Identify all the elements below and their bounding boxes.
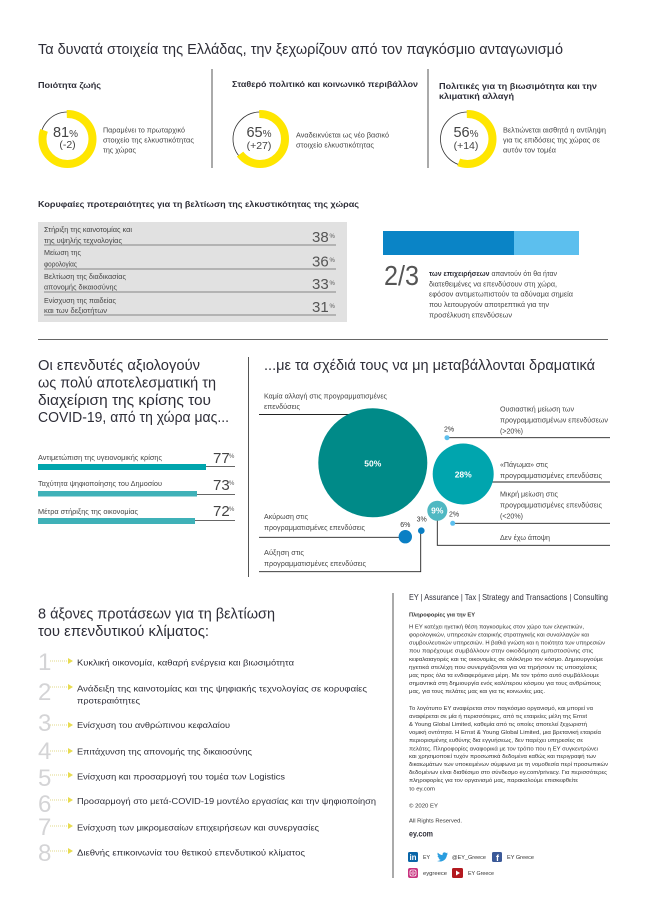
- heading: top priorities: Κορυφαίες προτεραιότητες για τη βελτίωση της ελκυστικότητας της χώρας: [38, 199, 360, 209]
- label: freeze: «Πάγωμα» στις: [500, 461, 549, 469]
- text block: legal: & Young Global Limited, καθεμία από τις οποίες αποτελεί ξεχωριστή: [409, 721, 587, 728]
- bubble: substantial decrease 2%: [444, 427, 454, 440]
- social: Instagram: eygreece: [423, 871, 447, 877]
- label: freeze: προγραμματισμένες επενδύσεις: [500, 472, 603, 480]
- description: sustainability: αυτόν τον τομέα: [503, 146, 556, 154]
- social: Instagram: [408, 868, 447, 878]
- social: LinkedIn: in: [409, 853, 417, 862]
- callout: two thirds of businesses: εφόσον αντιμετωπιστούν τα αδύναμα σημεία: [429, 290, 573, 298]
- item 4: [38, 738, 252, 765]
- label: no opinion: Δεν έχω άποψη: [500, 534, 550, 542]
- item 5: 5: [38, 765, 51, 792]
- item 8: Διεθνής επικοινωνία του θετικού επενδυτικού κλίματος: [77, 848, 305, 858]
- label: increase: προγραμματισμένες επενδύσεις: [264, 560, 367, 568]
- panel: priorities table: [38, 222, 347, 322]
- heading: sustainability: Πολιτικές για τη βιωσιμότητα και την: [439, 81, 597, 91]
- item 3: [38, 710, 230, 737]
- social: LinkedIn: [408, 852, 430, 862]
- bubble: small decrease 2%: [449, 512, 459, 526]
- item 3: Ενίσχυση του ανθρώπινου κεφαλαίου: [77, 720, 230, 730]
- panel: EY boilerplate: [408, 592, 608, 878]
- callout: two thirds of businesses: που λειτουργούν αποτρεπτικά για την: [429, 301, 550, 309]
- item 4: 4: [38, 738, 51, 765]
- text block: legal: Το λογότυπο ΕΥ αναφέρεται στον παγκόσμιο οργανισμό, και μπορεί να: [409, 705, 594, 712]
- label: substantial decrease: προγραμματισμένων επενδύσεων: [500, 417, 608, 425]
- bar: digitalisation 73%: %: [229, 481, 235, 487]
- panel: quality of life: [38, 80, 195, 166]
- label: small decrease: Μικρή μείωση στις: [500, 491, 559, 499]
- bubble: no opinion 9%: 9%: [431, 506, 444, 516]
- bubble: no change 50%: 50%: [364, 459, 382, 469]
- item 5: [38, 765, 285, 792]
- heading: stable environment: Σταθερό πολιτικό και κοινωνικό περιβάλλον: [232, 79, 418, 89]
- row: innovation 38%: %: [330, 234, 336, 240]
- bubble: cancellation 6%: [399, 522, 412, 543]
- heading: investors assess covid response: ως πολύ αποτελεσματική τη: [38, 374, 216, 392]
- heading: sustainability: κλιματική αλλαγή: [439, 91, 514, 101]
- social: LinkedIn: EY: [423, 855, 430, 861]
- label: no change: [264, 392, 388, 411]
- panel: sustainability and climate policies: [439, 81, 606, 166]
- row: taxation 36%: Μείωση της: [44, 249, 82, 257]
- item 6: 6: [38, 791, 51, 818]
- item 1: 1: [38, 649, 51, 676]
- row: education 31%: και των δεξιοτήτων: [44, 308, 108, 315]
- text block: about EY: μας, για τους πελάτες μας και για τις κοινωνίες μας.: [409, 688, 545, 695]
- donut chart: 65%: 65%: [246, 125, 272, 141]
- bar: health crisis 77%: 77: [213, 450, 230, 467]
- heading: plans not changing: ...με τα σχέδιά τους να μη μεταβάλλονται δραματικά: [264, 357, 595, 374]
- heading: investors assess covid response: [38, 357, 229, 426]
- text block: about EY: φορολογικών, υπηρεσιών εταιρικής στρατηγικής και συναλλαγών και: [409, 632, 590, 639]
- copyright: © 2020 EY: [409, 802, 438, 809]
- row: taxation 36%: φορολογίας: [44, 260, 78, 268]
- heading: sustainability: [439, 81, 597, 101]
- item 5: Ενίσχυση και προσαρμογή του τομέα των Logistics: [77, 772, 285, 782]
- bubble: freeze 28%: 28%: [455, 470, 472, 480]
- title: Τα δυνατά στοιχεία της Ελλάδας, την ξεχωρίζουν από τον παγκόσμιο ανταγωνισμό: [38, 41, 563, 58]
- text block: about EY: συμβουλευτικών υπηρεσιών. Η βαθιά γνώση και η ποιότητα των υπηρεσιών: [409, 640, 605, 647]
- bar: health crisis 77%: Αντιμετώπιση της υγειονομικής κρίσης: [38, 454, 163, 462]
- description: stable environment: Αναδεικνύεται ως νέο βασικό: [296, 132, 389, 140]
- bubble: no opinion 9%: [427, 501, 447, 521]
- item 2: [38, 679, 367, 706]
- bubble: increase 3%: [417, 517, 427, 534]
- description: quality of life: της χώρας: [103, 146, 137, 154]
- stacked bar: two thirds: [383, 231, 579, 255]
- bar: economic support 72%: %: [229, 507, 235, 513]
- label: freeze: [500, 461, 603, 480]
- bubble: cancellation 6%: 6%: [400, 522, 410, 529]
- label: increase: [264, 549, 367, 568]
- bar: economic support 72%: 72: [213, 503, 230, 520]
- item 8: 8: [38, 840, 51, 867]
- label: cancellation: [264, 513, 366, 532]
- item 6: [38, 791, 376, 818]
- description: quality of life: στοιχείο της ελκυστικότητας: [103, 136, 195, 144]
- bar: economic support 72%: [38, 503, 235, 524]
- row: taxation 36%: 36: [312, 254, 329, 270]
- social: YouTube: [452, 868, 494, 878]
- row: innovation 38%: της υψηλής τεχνολογίας: [44, 237, 123, 245]
- donut chart: 56%: [440, 112, 494, 166]
- label: increase: Αύξηση στις: [264, 549, 305, 557]
- text block: about EY: Η ΕΥ κατέχει ηγετική θέση παγκοσμίως στον χώρο των ελεγκτικών,: [409, 624, 584, 631]
- bar: health crisis 77%: [38, 450, 235, 470]
- row: taxation 36%: [44, 249, 336, 270]
- footer heading: service lines: EY | Assurance | Tax | Strategy and Transactions | Consulting: [409, 592, 608, 602]
- label: substantial decrease: Ουσιαστική μείωση των: [500, 406, 575, 414]
- callout: two thirds of businesses: των επιχειρήσεων απαντούν ότι θα ήταν: [429, 270, 557, 278]
- donut chart: 65%: (+27): [247, 140, 271, 152]
- description: quality of life: Παραμένει το πρωταρχικό: [103, 126, 185, 134]
- item 3: 3: [38, 710, 51, 737]
- donut chart: 56%: (+14): [454, 140, 478, 152]
- donut chart: 81%: 81%: [53, 125, 78, 141]
- item 8: [38, 840, 305, 867]
- social: Twitter: @EY_Greece: [452, 855, 486, 861]
- item 1: [38, 649, 294, 676]
- website: ey.com: [409, 830, 433, 839]
- row: justice 33%: απονομής δικαιοσύνης: [44, 284, 118, 292]
- item 2: Ανάδειξη της καινοτομίας και της ψηφιακής τεχνολογίας σε κορυφαίες: [77, 684, 367, 694]
- text block: legal: το ey.com: [409, 786, 435, 792]
- description: sustainability: για τις επιδόσεις της χώρας σε: [503, 136, 600, 144]
- row: justice 33%: Βελτίωση της διαδικασίας: [44, 273, 127, 281]
- bar: health crisis 77%: %: [229, 454, 235, 460]
- row: justice 33%: [44, 273, 336, 293]
- list: eight proposals: [38, 649, 376, 867]
- item 6: Προσαρμογή στο μετά-COVID-19 μοντέλο εργασίας και την ψηφιοποίηση: [77, 796, 376, 806]
- item 1: Κυκλική οικονομία, καθαρή ενέργεια και βιωσιμότητα: [77, 658, 294, 668]
- bar: digitalisation 73%: [38, 477, 235, 496]
- callout: two thirds of businesses: διατεθειμένες να επενδύσουν στη χώρα,: [429, 280, 557, 288]
- text block: about EY: ηγετικά στελέχη που συνεργάζονται για να τηρήσουν τις υποσχέσεις: [409, 664, 597, 671]
- label: small decrease: προγραμματισμένες επενδύσεις: [500, 502, 603, 510]
- bubble chart: investment plans: [259, 392, 610, 572]
- row: innovation 38%: [44, 226, 336, 246]
- text block: about EY: [409, 624, 605, 695]
- bubble: substantial decrease 2%: 2%: [444, 427, 454, 434]
- bar: economic support 72%: Μέτρα στήριξης της οικονομίας: [38, 508, 139, 516]
- description: quality of life: [103, 126, 195, 154]
- row: justice 33%: %: [330, 281, 336, 287]
- row: education 31%: %: [330, 304, 336, 310]
- label: substantial decrease: [500, 406, 608, 436]
- donut chart: 56%: 56%: [453, 125, 479, 141]
- bar: digitalisation 73%: Ταχύτητα ψηφιοποίησης του Δημοσίου: [38, 480, 162, 488]
- bar chart: covid response ratings: [38, 450, 235, 524]
- heading: eight proposals: [38, 606, 275, 640]
- heading: quality of life: Ποιότητα ζωής: [38, 80, 102, 90]
- social: Twitter: [437, 852, 486, 862]
- item 7: [38, 814, 319, 841]
- text block: about EY: κεφαλαιαγορές και τις οικονομίες σε ολόκληρο τον κόσμο. Δημιουργούμε: [409, 656, 603, 663]
- text block: legal: πληροφορίες για τον οργανισμό μας, παρακαλούμε επισκεφθείτε: [409, 777, 578, 784]
- description: stable environment: [296, 132, 389, 150]
- text block: legal: περιορισμένης ευθύνης δια εγγυήσεως, δεν παρέχει υπηρεσίες σε: [409, 737, 583, 744]
- callout: two thirds of businesses: [384, 260, 573, 320]
- text block: about EY: που παρέχουμε συμβάλλουν στην οικοδόμηση εμπιστοσύνης στις: [409, 648, 593, 655]
- social: Facebook: [492, 852, 534, 863]
- heading: investors assess covid response: Οι επενδυτές αξιολογούν: [38, 357, 200, 374]
- label: cancellation: προγραμματισμένες επενδύσεις: [264, 524, 366, 532]
- item 4: Επιτάχυνση της απονομής της δικαιοσύνης: [77, 746, 252, 756]
- item 2: προτεραιότητες: [77, 696, 140, 706]
- row: education 31%: Ενίσχυση της παιδείας: [44, 297, 117, 305]
- row: justice 33%: 33: [312, 276, 329, 293]
- text block: legal: και χρησιμοποιεί τυχόν προσωπικά δεδομένα καθώς και περιγραφή των: [409, 753, 596, 760]
- donut chart: 81%: (-2): [59, 139, 76, 151]
- row: innovation 38%: Στήριξη της καινοτομίας και: [44, 226, 132, 234]
- callout: two thirds of businesses: προσέλκυση επενδύσεων: [429, 312, 513, 320]
- label: no change: επενδύσεις: [264, 403, 301, 411]
- description: sustainability: [503, 126, 606, 154]
- callout: two thirds of businesses: 2/3: [384, 260, 419, 291]
- item 7: Ενίσχυση των μικρομεσαίων επιχειρήσεων και συνεργασίες: [77, 822, 319, 832]
- text block: legal: δεδομένων είναι διαθέσιμο στο σύνδεσμο ey.com/privacy. Για περισσότερες: [409, 769, 607, 776]
- text block: about EY: σημαντικά στη δημιουργία ενός καλύτερου κόσμου για τους ανθρώπους: [409, 680, 601, 687]
- label: cancellation: Ακύρωση στις: [264, 513, 309, 521]
- item 2: 2: [38, 679, 51, 706]
- bar: digitalisation 73%: 73: [213, 477, 230, 494]
- text block: legal: [409, 705, 608, 792]
- text block: legal: αναφέρεται σε μία ή περισσότερες, από τις εταιρείες μέλη της Ernst: [409, 713, 587, 720]
- text block: legal: δικαιωμάτων των υποκειμένων σύμφωνα με τη νομοθεσία περί προσωπικών: [409, 761, 608, 768]
- label: small decrease: [500, 491, 603, 520]
- row: education 31%: 31: [312, 299, 329, 316]
- text block: legal: νομική οντότητα. Η Ernst & Young Global Limited, μια βρετανική εταιρεία: [409, 729, 602, 736]
- heading: investors assess covid response: COVID-19, από τη χώρα μας...: [38, 409, 229, 426]
- donut chart: 65%: [233, 112, 287, 166]
- label: small decrease: (<20%): [500, 513, 523, 520]
- text block: legal: πελάτες. Πληροφορίες αναφορικά με τον τρόπο που η ΕΥ συγκεντρώνει: [409, 745, 599, 752]
- label: no change: Καμία αλλαγή στις προγραμματισμένες: [264, 392, 388, 400]
- heading: eight proposals: του επενδυτικού κλίματος:: [38, 623, 209, 640]
- bubble: small decrease 2%: 2%: [449, 512, 459, 519]
- social: Facebook: EY Greece: [507, 855, 534, 861]
- bubble: no change 50%: [318, 408, 427, 517]
- rights reserved: All Rights Reserved.: [409, 818, 462, 824]
- text block: about EY: μας προς όλα τα ενδιαφερόμενα μέρη. Με τον τρόπο αυτό συμβάλλουμε: [409, 672, 599, 679]
- social: Facebook: f: [496, 853, 500, 863]
- footer subheading: Πληροφορίες για την ΕΥ: [409, 613, 475, 619]
- heading: eight proposals: 8 άξονες προτάσεων για τη βελτίωση: [38, 606, 275, 622]
- bubble: increase 3%: 3%: [417, 517, 427, 524]
- row: taxation 36%: %: [330, 258, 336, 264]
- description: sustainability: Βελτιώνεται αισθητά η αντίληψη: [503, 126, 606, 134]
- bubble: freeze 28%: [433, 444, 494, 504]
- item 7: 7: [38, 814, 51, 841]
- row: education 31%: [44, 297, 336, 316]
- donut chart: 81%: [40, 112, 94, 166]
- social: YouTube: EY Greece: [468, 871, 494, 877]
- description: stable environment: στοιχείο ελκυστικότητας: [296, 142, 375, 150]
- panel: political and social environment: [232, 79, 418, 166]
- row: innovation 38%: 38: [312, 229, 329, 246]
- label: substantial decrease: (>20%): [500, 429, 523, 436]
- heading: investors assess covid response: διαχείριση της κρίσης του: [38, 392, 211, 409]
